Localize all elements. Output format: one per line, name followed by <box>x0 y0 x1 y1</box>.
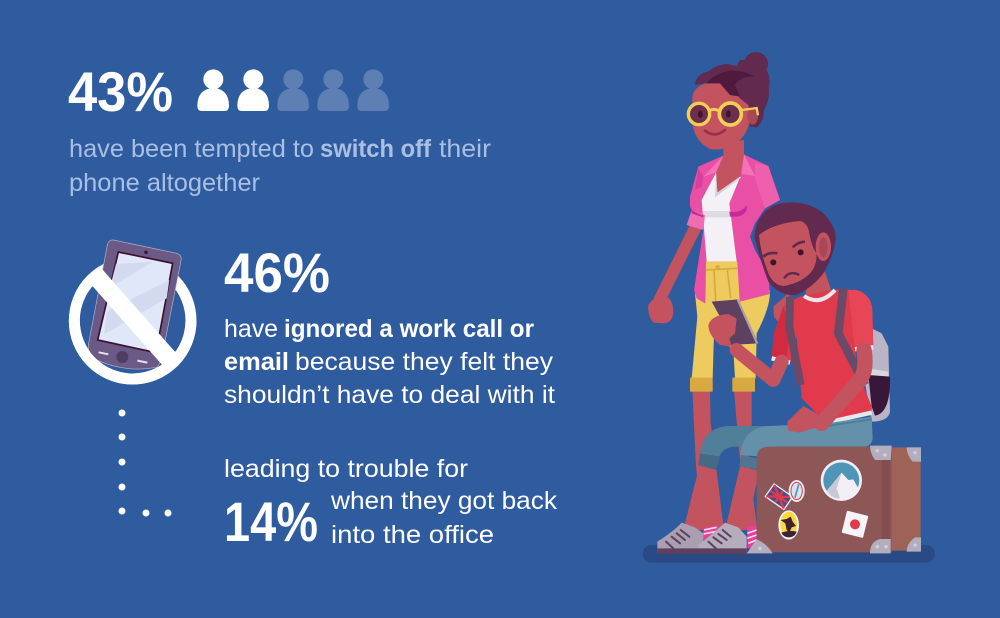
text: tempted to switch off: have been tempted to <box>69 135 314 163</box>
text: ignored a work call or email: have <box>224 315 278 343</box>
text: ignored a work call or email <box>224 315 555 409</box>
text: when they got back into the office <box>330 487 558 549</box>
statistic: 43%: 43% <box>68 60 173 123</box>
text: ignored a work call or email: email <box>224 348 289 376</box>
text: tempted to switch off <box>69 135 491 197</box>
statistic: 46%: 46% <box>224 241 330 304</box>
hair <box>744 52 768 76</box>
text: leading to trouble for: leading to trouble for <box>224 455 468 483</box>
sticker: compass <box>789 480 805 502</box>
jacket <box>690 154 780 303</box>
text: when they got back into the office: into the office <box>331 521 494 549</box>
text: ignored a work call or email: shouldn’t have to deal with it <box>224 381 555 409</box>
ground shadow <box>643 545 935 563</box>
icon row: 2 of 5 people <box>197 69 389 111</box>
suitcase <box>747 446 921 553</box>
sticker: union flag <box>764 483 794 510</box>
woman figure <box>648 52 790 548</box>
statistic: 14%: 14% <box>224 490 318 553</box>
sticker: kangaroo <box>778 510 799 540</box>
dotted connector <box>118 410 172 516</box>
text: tempted to switch off: switch off <box>320 135 432 163</box>
text: tempted to switch off: phone altogether <box>69 169 260 197</box>
pants waistband and front <box>705 262 740 307</box>
text: when they got back into the office: when they got back <box>330 487 558 515</box>
illustration: travellers with suitcase <box>643 52 935 563</box>
sticker: mountain <box>821 460 862 501</box>
man figure <box>657 202 890 554</box>
icon: crossed-out phone <box>74 240 191 379</box>
text: tempted to switch off: their <box>439 135 491 163</box>
text: ignored a work call or email: because they felt they <box>295 348 554 376</box>
sticker: japan flag <box>842 511 868 538</box>
text: ignored a work call or email: ignored a work call or <box>284 315 534 343</box>
